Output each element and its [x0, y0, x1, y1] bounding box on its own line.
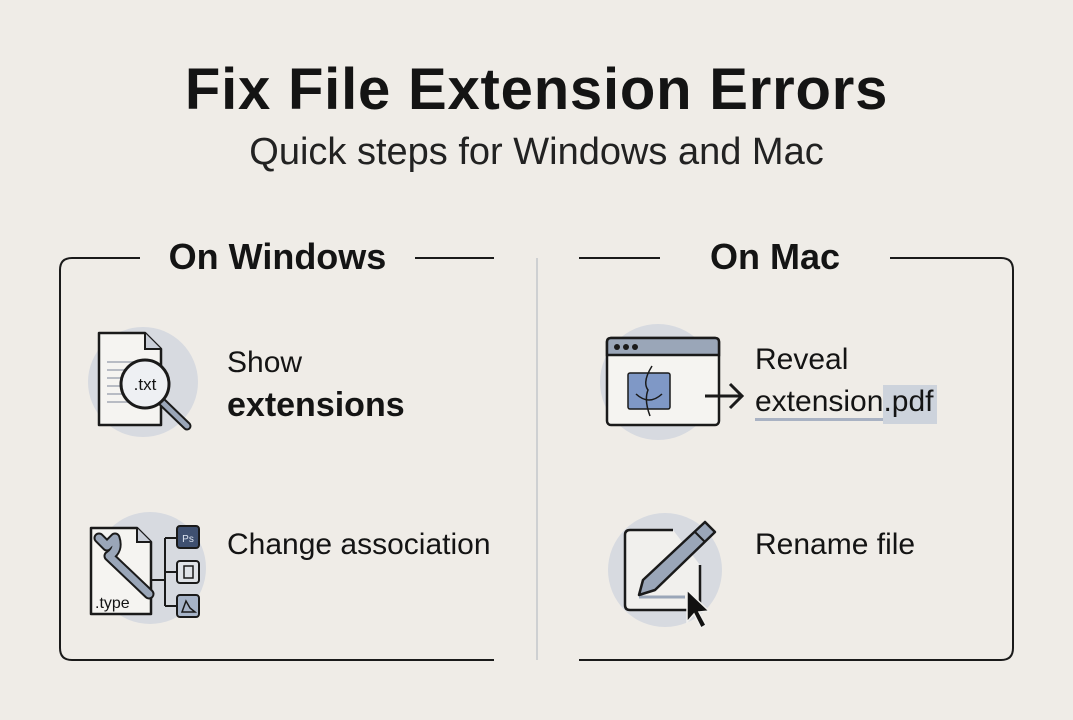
icon: file with magnifier [88, 327, 198, 437]
icon: wrench file with apps [90, 512, 206, 624]
text: Rename file: Rename file [755, 528, 915, 561]
title: Fix File Extension Errors [185, 57, 888, 122]
subtitle: Quick steps for Windows and Mac [249, 131, 824, 173]
text: Reveal extension.pdf: Reveal [755, 343, 848, 376]
text: Show extensions: Show [227, 346, 302, 379]
heading: On Mac: On Mac [710, 236, 840, 277]
text: Reveal extension.pdf [755, 343, 937, 424]
icon: wrench file with apps: Ps [182, 534, 194, 545]
text: Show extensions: extensions [227, 386, 405, 424]
icon: file with magnifier: .txt [134, 375, 157, 394]
heading: On Windows: On Windows [169, 236, 386, 277]
text: Change association: Change association [227, 528, 491, 561]
icon: rename pencil [608, 513, 722, 627]
text: Show extensions [227, 346, 405, 424]
text: Reveal extension.pdf: extension.pdf [755, 385, 933, 418]
icon: wrench file with apps: .type [95, 595, 130, 612]
icon: finder window with arrow [600, 324, 744, 440]
